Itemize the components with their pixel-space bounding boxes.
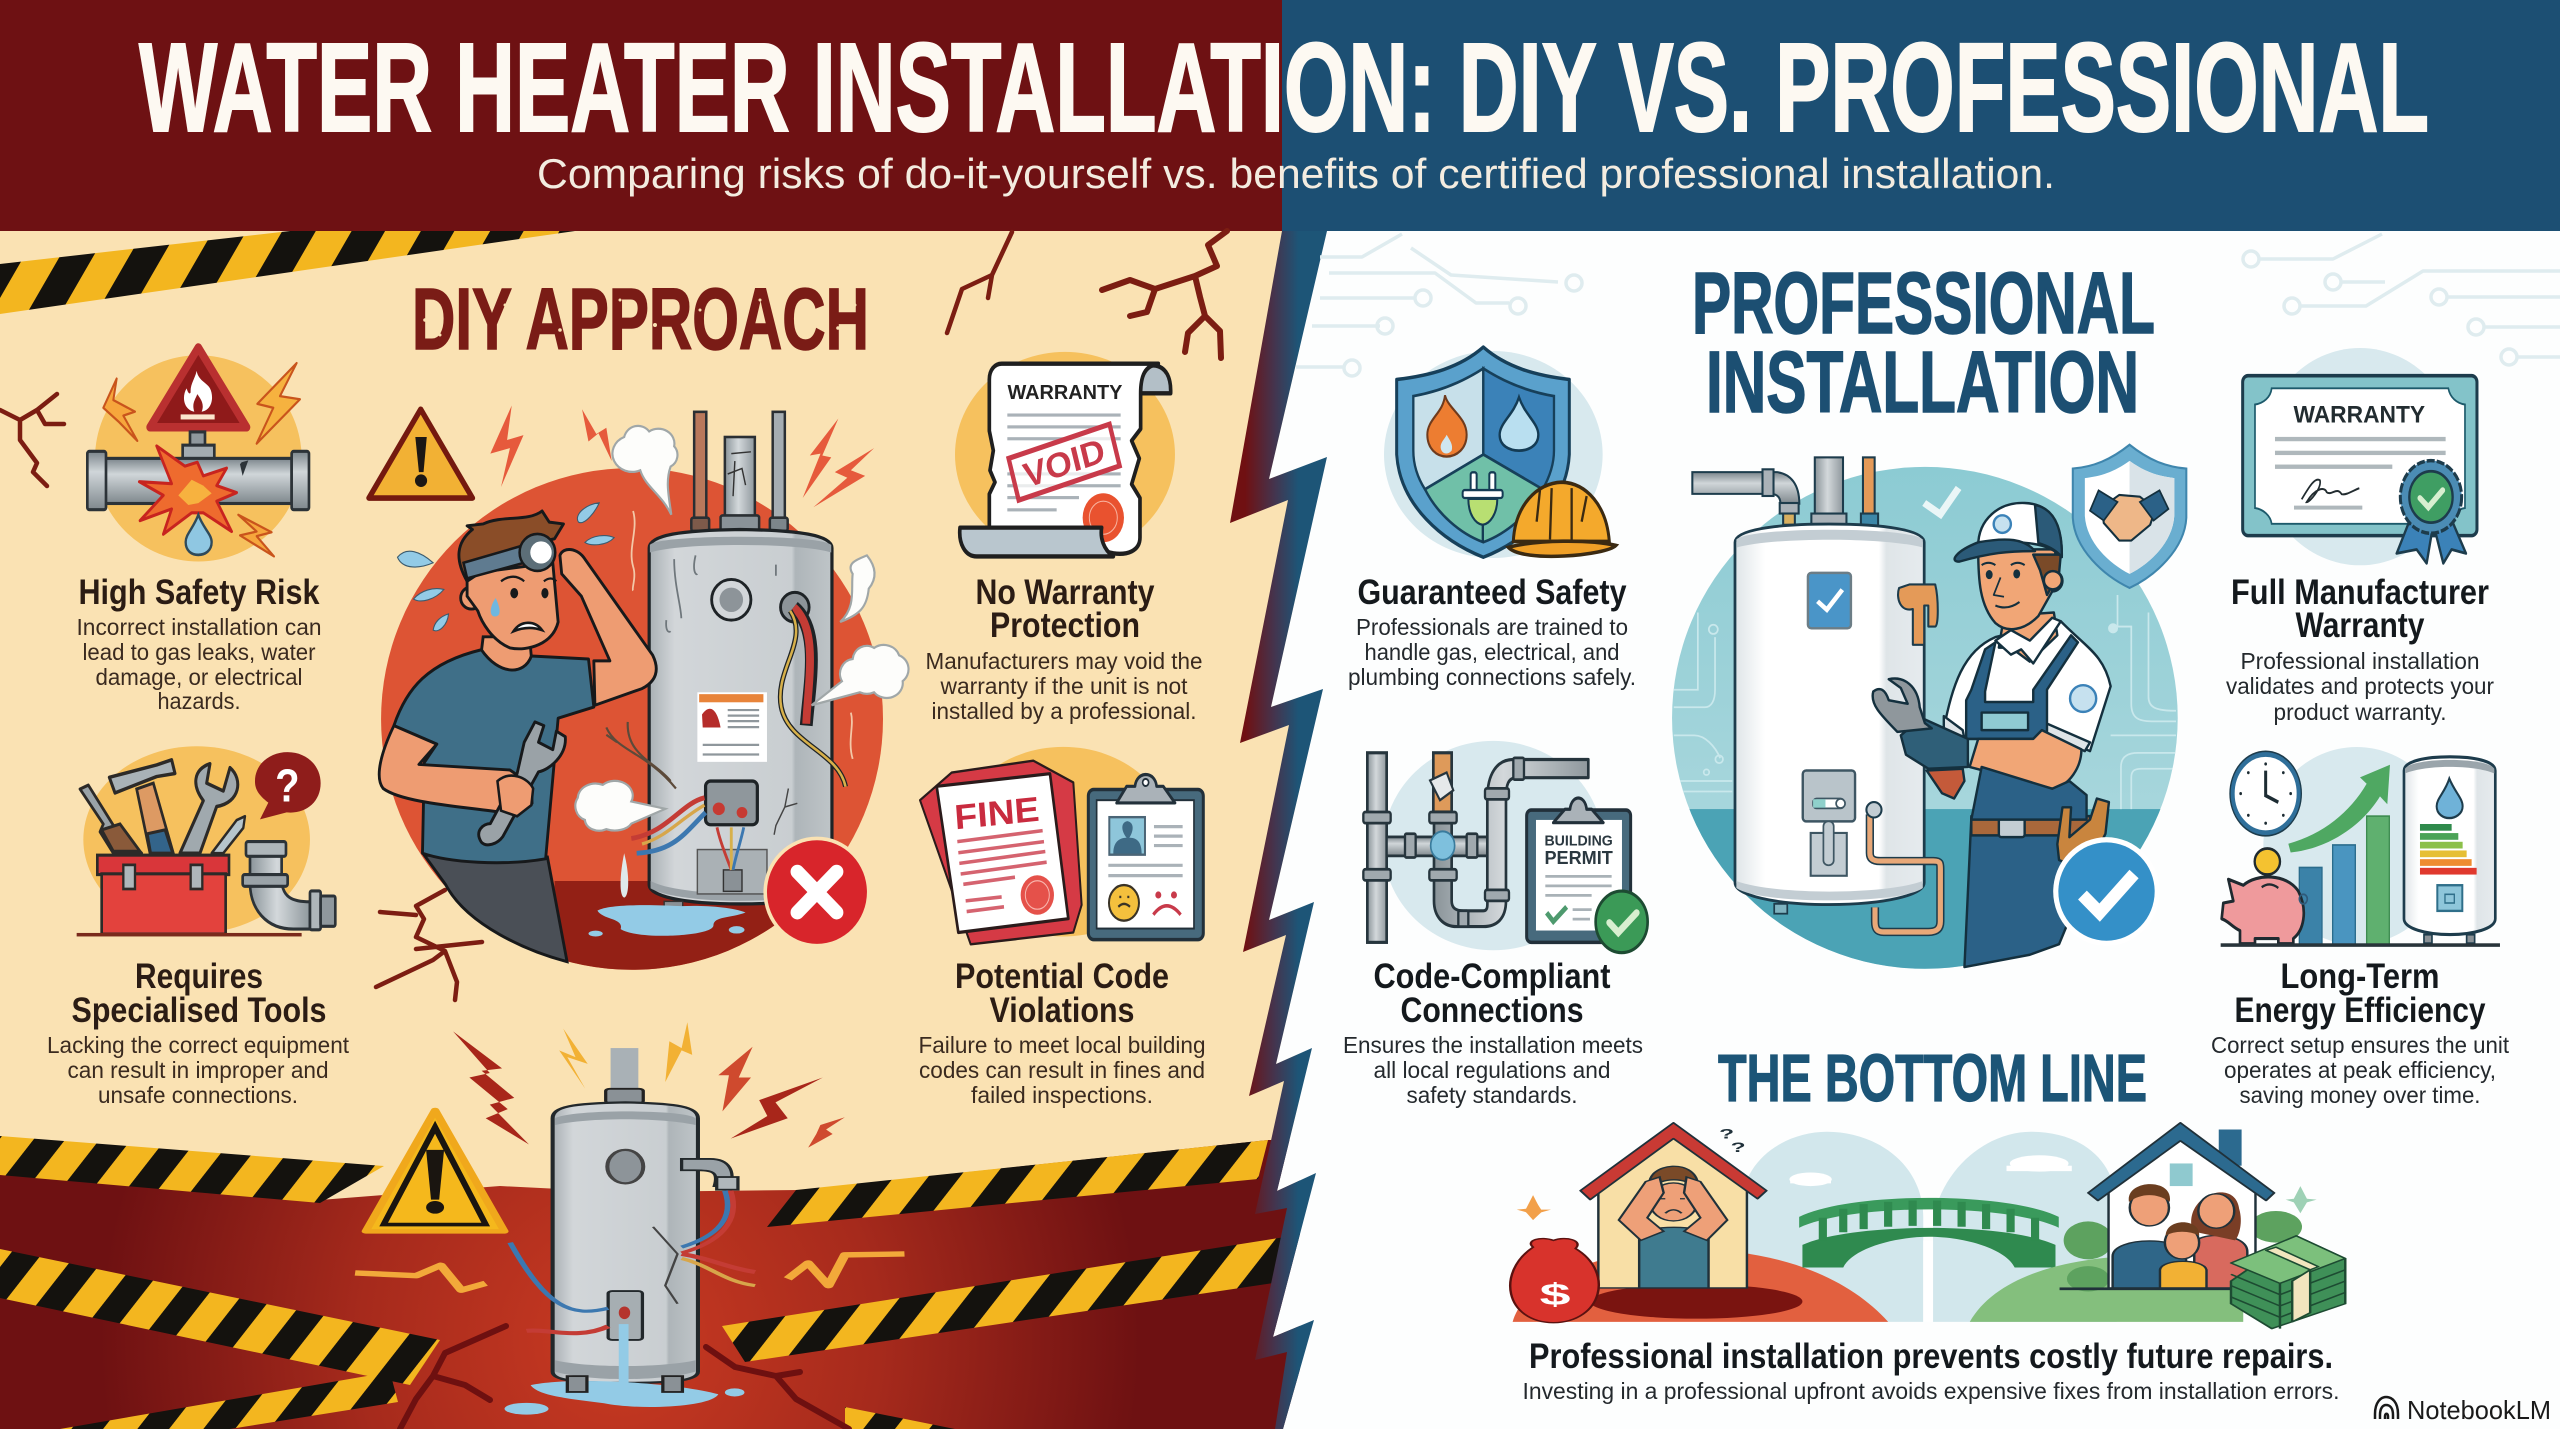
heater body <box>553 1102 698 1383</box>
icon: warranty void: WARRANTY <box>1007 382 1123 405</box>
text: requires specialised tools: can result in improper and <box>68 1057 328 1083</box>
stressed house: ? <box>1731 1140 1746 1156</box>
subtitle: Comparing risks of do-it-yourself vs. benefits of certified professional installation. <box>537 150 2055 197</box>
text: full manufacturer warranty: Professional installation <box>2240 648 2480 674</box>
text: full manufacturer warranty: product warranty. <box>2274 699 2446 725</box>
text: high safety risk: lead to gas leaks, water <box>82 639 316 665</box>
text: code-compliant connections <box>1343 957 1643 1108</box>
icon: fine and inspection clipboard <box>920 747 1203 944</box>
hero illustration: DIY frustrated man and failing heater <box>369 406 912 992</box>
icon: warranty void: VOID <box>1020 431 1109 495</box>
technician <box>1873 503 2111 967</box>
text: potential code violations: failed inspections. <box>971 1082 1153 1108</box>
text: code-compliant connections: Ensures the installation meets <box>1343 1032 1643 1058</box>
text: high safety risk: Incorrect installation can <box>76 614 322 640</box>
bottom line summary: Investing in a professional upfront avoids expensive fixes from installation errors. <box>1522 1378 2340 1404</box>
text: no warranty protection: warranty if the unit is not <box>940 673 1188 699</box>
text: potential code violations: Violations <box>990 991 1134 1030</box>
bottom line summary: Professional installation prevents costly future repairs. <box>1529 1337 2333 1376</box>
caution tape lower left <box>60 1372 398 1429</box>
exposed wires <box>510 1191 755 1333</box>
handshake shield <box>2073 445 2186 588</box>
heading: professional installation <box>1692 255 2155 431</box>
header background: DIY side <box>0 0 1282 231</box>
sky arches <box>1741 1132 2117 1322</box>
green hill <box>1970 1256 2243 1322</box>
bottom line summary <box>1522 1337 2340 1404</box>
danger bolts <box>490 406 874 507</box>
text: no warranty protection: installed by a professional. <box>932 698 1196 724</box>
icon: high safety risk <box>87 348 309 561</box>
caution tape upper left <box>0 1136 384 1203</box>
caution tape middle right <box>722 1237 1285 1362</box>
heading: the bottom line: THE BOTTOM LINE <box>1718 1041 2147 1116</box>
text: requires specialised tools: Lacking the correct equipment <box>47 1032 349 1058</box>
text: code-compliant connections: Code-Compliant <box>1374 957 1611 996</box>
heater pipes <box>691 412 788 531</box>
text: full manufacturer warranty <box>2226 573 2494 725</box>
text: long-term energy efficiency: saving money over time. <box>2240 1082 2480 1108</box>
money bag <box>1510 1195 1599 1323</box>
heading: DIY approach <box>412 271 869 368</box>
text: guaranteed safety: Professionals are trained to <box>1356 614 1628 640</box>
text: code-compliant connections: Connections <box>1400 991 1584 1030</box>
text: long-term energy efficiency: Energy Efficiency <box>2234 991 2486 1030</box>
cracks on left panel <box>0 231 1227 1000</box>
text: potential code violations: codes can result in fines and <box>919 1057 1205 1083</box>
blue check badge <box>2053 837 2160 946</box>
illustration: the bottom line scene <box>1510 1123 2345 1329</box>
hero illustration: professional technician and heater <box>1660 445 2210 985</box>
right panel white background <box>1269 231 2560 1429</box>
bridge <box>1799 1198 2059 1268</box>
heading: professional installation: PROFESSIONAL <box>1692 255 2155 352</box>
text: requires specialised tools: unsafe connections. <box>98 1082 298 1108</box>
bottom illustration: failing water heater <box>355 1022 904 1415</box>
sparkles <box>1517 1186 2317 1220</box>
text: potential code violations <box>918 957 1206 1108</box>
supply pipes <box>1692 457 1878 526</box>
stressed house: ? <box>1719 1127 1734 1142</box>
frustrated man <box>379 503 656 962</box>
icon: long-term efficiency <box>2221 747 2500 947</box>
water leak <box>504 1324 744 1415</box>
text: full manufacturer warranty: Full Manufacturer <box>2231 573 2489 612</box>
text: long-term energy efficiency: Correct setup ensures the unit <box>2211 1032 2509 1058</box>
cash stack <box>2231 1236 2345 1329</box>
stressed house <box>1580 1123 1767 1288</box>
text: no warranty protection: Manufacturers may void the <box>926 648 1202 674</box>
lightning divider <box>1230 231 1327 1429</box>
small check mark <box>1924 488 1959 514</box>
circuit pattern top right panel <box>1296 234 2560 376</box>
text: guaranteed safety: handle gas, electrical, and <box>1364 639 1620 665</box>
text: potential code violations: Potential Code <box>955 957 1169 996</box>
header background: professional side <box>1282 0 2560 231</box>
happy family house <box>2060 1123 2274 1290</box>
caution tape middle left <box>0 1249 440 1385</box>
text: full manufacturer warranty: Warranty <box>2296 606 2425 645</box>
water puddle <box>588 853 746 936</box>
text: requires specialised tools: Specialised Tools <box>72 991 326 1030</box>
icon: specialised tools: ? <box>275 761 300 812</box>
icon: specialised tools <box>77 746 335 936</box>
red hill <box>1513 1249 1888 1322</box>
text: no warranty protection: No Warranty <box>976 573 1155 612</box>
steam clouds <box>575 426 909 831</box>
left panel background <box>0 231 1300 1429</box>
text: long-term energy efficiency <box>2211 957 2509 1108</box>
icon: fine and inspection clipboard: FINE <box>953 789 1041 837</box>
caution tape top left <box>0 231 575 314</box>
icon: guaranteed safety <box>1384 347 1616 558</box>
text: high safety risk: High Safety Risk <box>78 573 320 612</box>
icon: warranty void <box>955 352 1175 557</box>
icon: warranty certificate <box>2243 348 2477 565</box>
text: high safety risk <box>76 573 322 714</box>
money bag: $ <box>1540 1277 1571 1311</box>
surrounding bolts <box>355 1022 904 1290</box>
heading: DIY approach: DIY APPROACH <box>412 271 869 368</box>
text: no warranty protection: Protection <box>990 606 1140 645</box>
warning sign <box>366 1110 504 1231</box>
text: guaranteed safety: plumbing connections safely. <box>1348 664 1636 690</box>
text: requires specialised tools <box>47 957 349 1108</box>
heater pipe and collar <box>611 1048 638 1093</box>
NotebookLM watermark: NotebookLM <box>2407 1395 2551 1425</box>
text: no warranty protection <box>926 573 1202 724</box>
text: high safety risk: hazards. <box>158 688 240 714</box>
bottom red danger zone <box>0 1136 1300 1429</box>
text: guaranteed safety <box>1348 573 1636 690</box>
clean water heater <box>1735 524 1924 905</box>
text: long-term energy efficiency: Long-Term <box>2280 957 2440 996</box>
warning triangle <box>369 409 472 498</box>
text: code-compliant connections: all local regulations and <box>1374 1057 1610 1083</box>
heading: professional installation: INSTALLATION <box>1706 334 2139 431</box>
icon: code-compliant pipework: PERMIT <box>1544 848 1614 868</box>
icon: code-compliant pipework <box>1363 741 1648 953</box>
text: full manufacturer warranty: validates and protects your <box>2226 673 2494 699</box>
caution tape upper right <box>767 1140 1268 1227</box>
text: high safety risk: damage, or electrical <box>96 664 302 690</box>
text: requires specialised tools: Requires <box>135 957 263 996</box>
heater body <box>649 530 832 904</box>
text: guaranteed safety: Guaranteed Safety <box>1358 573 1627 612</box>
icon: warranty certificate: WARRANTY <box>2293 400 2425 428</box>
text: code-compliant connections: safety standards. <box>1406 1082 1578 1108</box>
caution tape lower right <box>845 1407 955 1429</box>
text: potential code violations: Failure to meet local building <box>918 1032 1206 1058</box>
text: long-term energy efficiency: operates at peak efficiency, <box>2224 1057 2496 1083</box>
red X badge <box>763 837 871 948</box>
icon: code-compliant pipework: BUILDING <box>1544 832 1613 849</box>
